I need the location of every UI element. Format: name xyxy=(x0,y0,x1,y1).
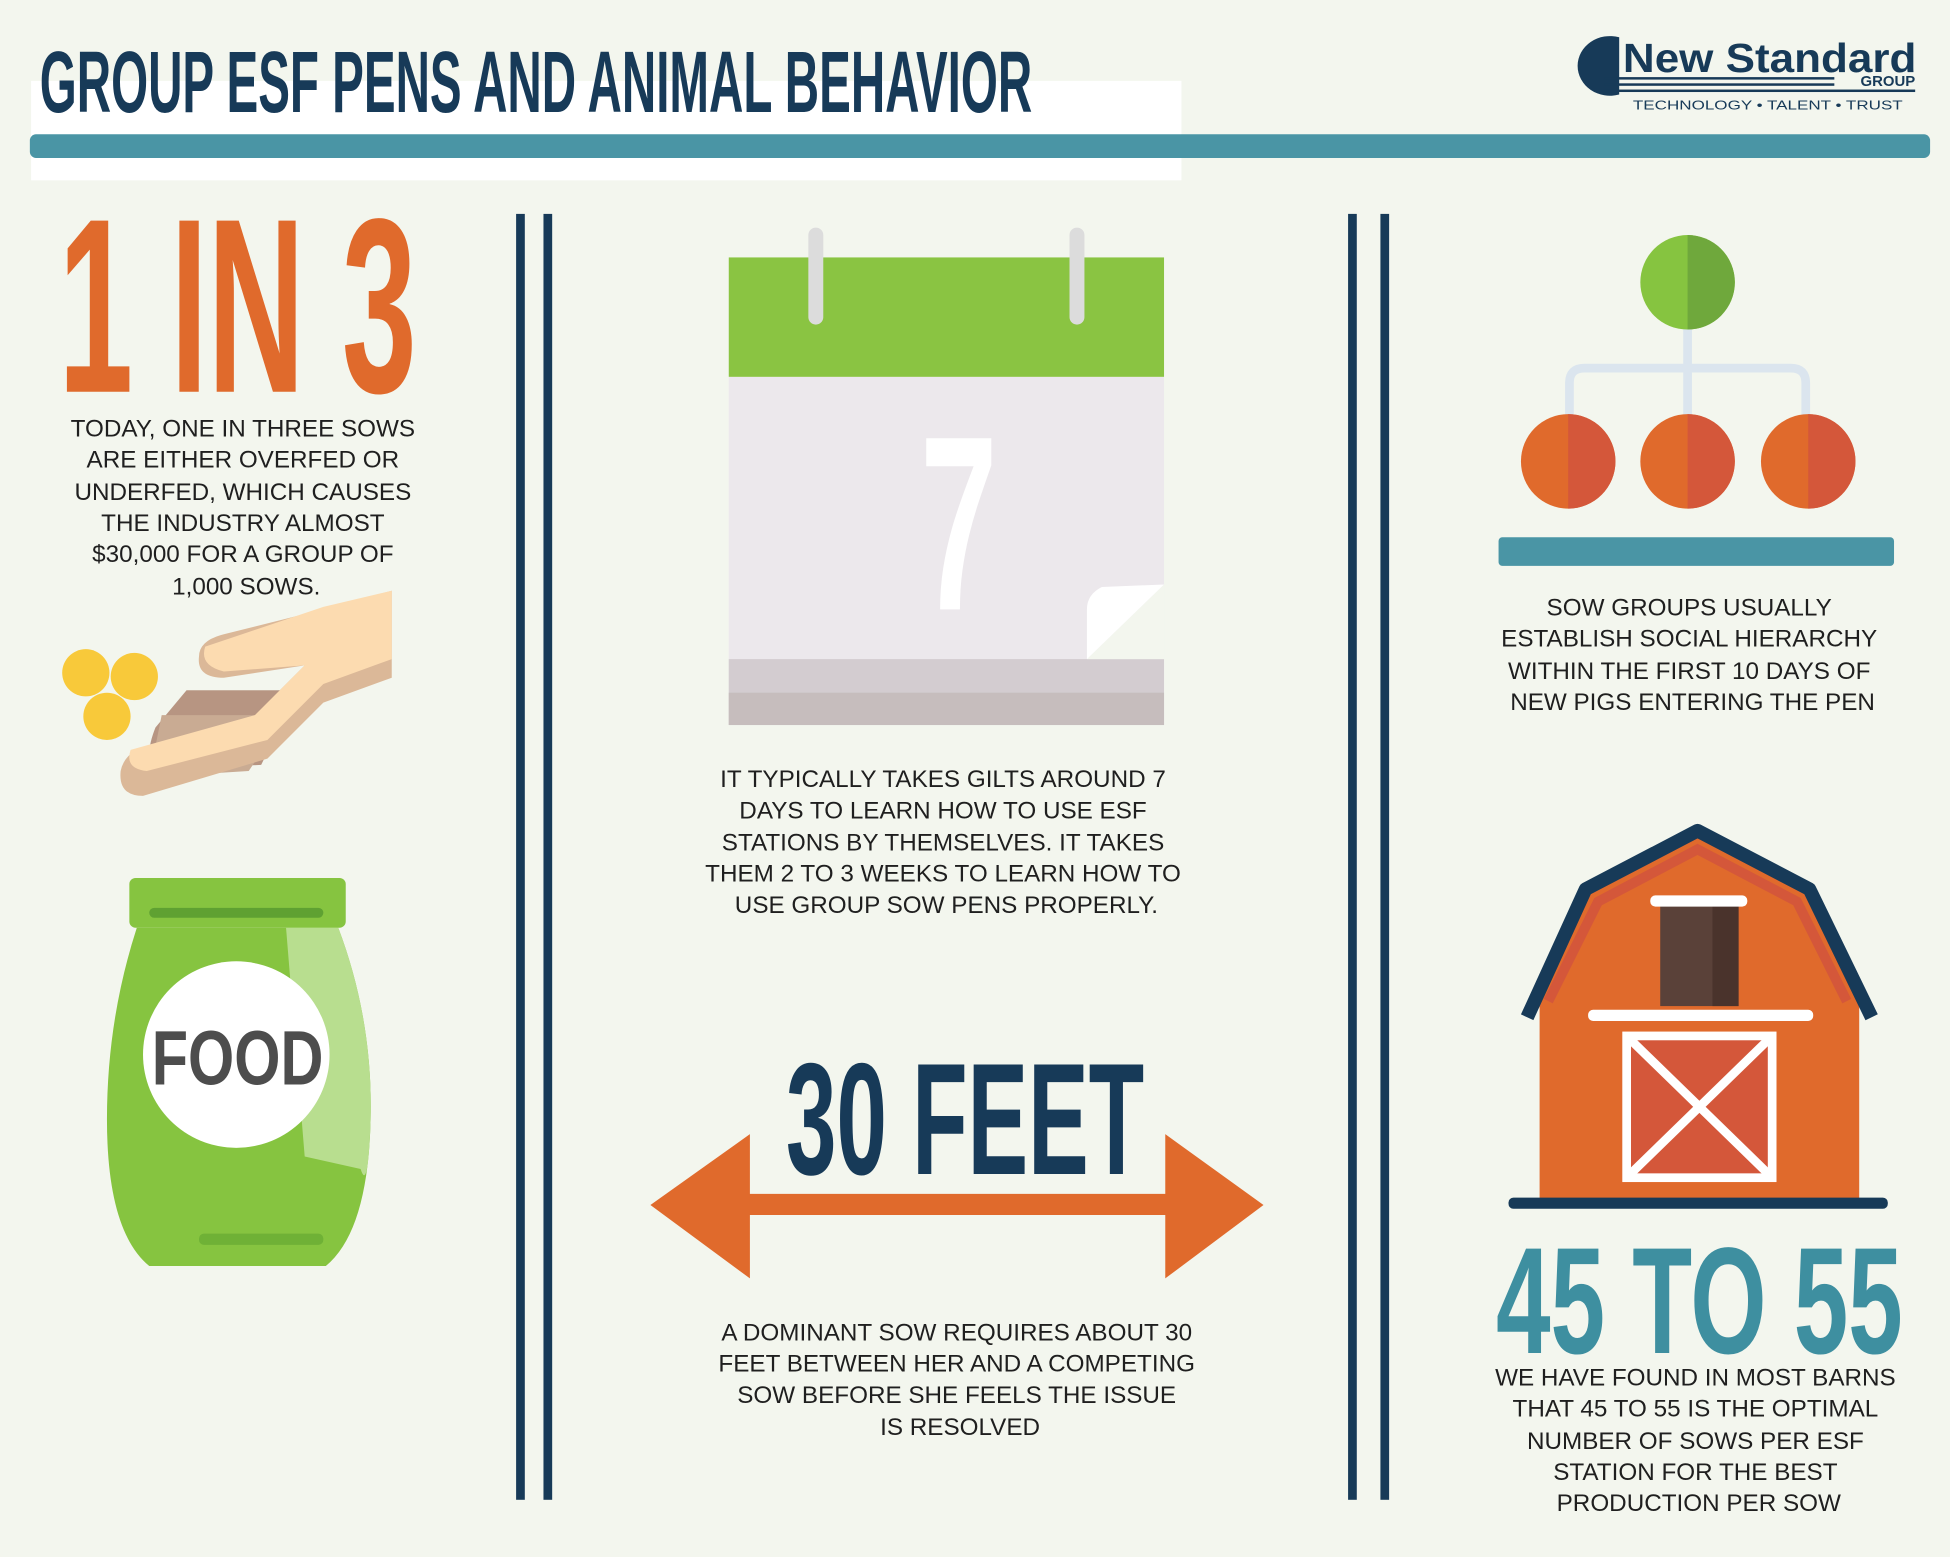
text: 7 days: USE GROUP SOW PENS PROPERLY. xyxy=(735,892,1158,919)
title: GROUP ESF PENS AND ANIMAL BEHAVIOR xyxy=(40,34,1032,131)
text: hierarchy: NEW PIGS ENTERING THE PEN xyxy=(1510,689,1875,716)
text: 7 days: DAYS TO LEARN HOW TO USE ESF xyxy=(739,797,1147,824)
logo xyxy=(1578,35,1916,112)
logo: GROUP xyxy=(1860,73,1915,90)
arrow: double xyxy=(650,1134,1264,1278)
text: 7 days: THEM 2 TO 3 WEEKS TO LEARN HOW TO xyxy=(705,861,1181,888)
header bar xyxy=(30,134,1930,158)
text: hierarchy: SOW GROUPS USUALLY xyxy=(1547,595,1832,622)
text: 7 days: STATIONS BY THEMSELVES. IT TAKES xyxy=(722,830,1164,857)
text: optimal number: WE HAVE FOUND IN MOST BARNS xyxy=(1495,1364,1896,1391)
text: 7 days: IT TYPICALLY TAKES GILTS AROUND 7 xyxy=(720,766,1166,793)
icon: barn xyxy=(1509,831,1888,1209)
text: overfed: 1,000 SOWS. xyxy=(172,573,320,600)
text: 30 feet: SOW BEFORE SHE FEELS THE ISSUE xyxy=(737,1382,1176,1409)
icon: food bag: FOOD xyxy=(152,1015,323,1101)
dividers xyxy=(516,214,1389,1500)
text: optimal number: THAT 45 TO 55 IS THE OPTIMAL xyxy=(1513,1395,1878,1422)
stat: 1 in 3: 1 IN 3 xyxy=(58,167,417,445)
icon: coins and hand xyxy=(62,591,392,796)
text: overfed: THE INDUSTRY ALMOST xyxy=(101,510,385,537)
stat: 30 feet: 30 FEET xyxy=(786,1030,1144,1208)
text: optimal number: STATION FOR THE BEST xyxy=(1553,1459,1838,1486)
logo: New Standard xyxy=(1623,35,1916,81)
text: optimal number: PRODUCTION PER SOW xyxy=(1557,1490,1841,1517)
logo: TECHNOLOGY • TALENT • TRUST xyxy=(1633,97,1903,112)
icon: food bag xyxy=(107,878,371,1266)
text: overfed: TODAY, ONE IN THREE SOWS xyxy=(71,416,415,443)
text: hierarchy: ESTABLISH SOCIAL HIERARCHY xyxy=(1501,626,1877,653)
icon: calendar xyxy=(729,228,1164,725)
text: overfed: $30,000 FOR A GROUP OF xyxy=(92,541,394,568)
text: 30 feet: A DOMINANT SOW REQUIRES ABOUT 30 xyxy=(721,1320,1192,1347)
text: 30 feet: IS RESOLVED xyxy=(880,1414,1040,1441)
icon: hierarchy xyxy=(1499,235,1894,566)
icon: calendar: 7 xyxy=(920,384,997,662)
text: overfed: UNDERFED, WHICH CAUSES xyxy=(74,479,411,506)
text: 30 feet: FEET BETWEEN HER AND A COMPETING xyxy=(718,1351,1195,1378)
text: optimal number: NUMBER OF SOWS PER ESF xyxy=(1527,1428,1864,1455)
text: overfed: ARE EITHER OVERFED OR xyxy=(87,447,399,474)
text: hierarchy: WITHIN THE FIRST 10 DAYS OF xyxy=(1508,658,1870,685)
